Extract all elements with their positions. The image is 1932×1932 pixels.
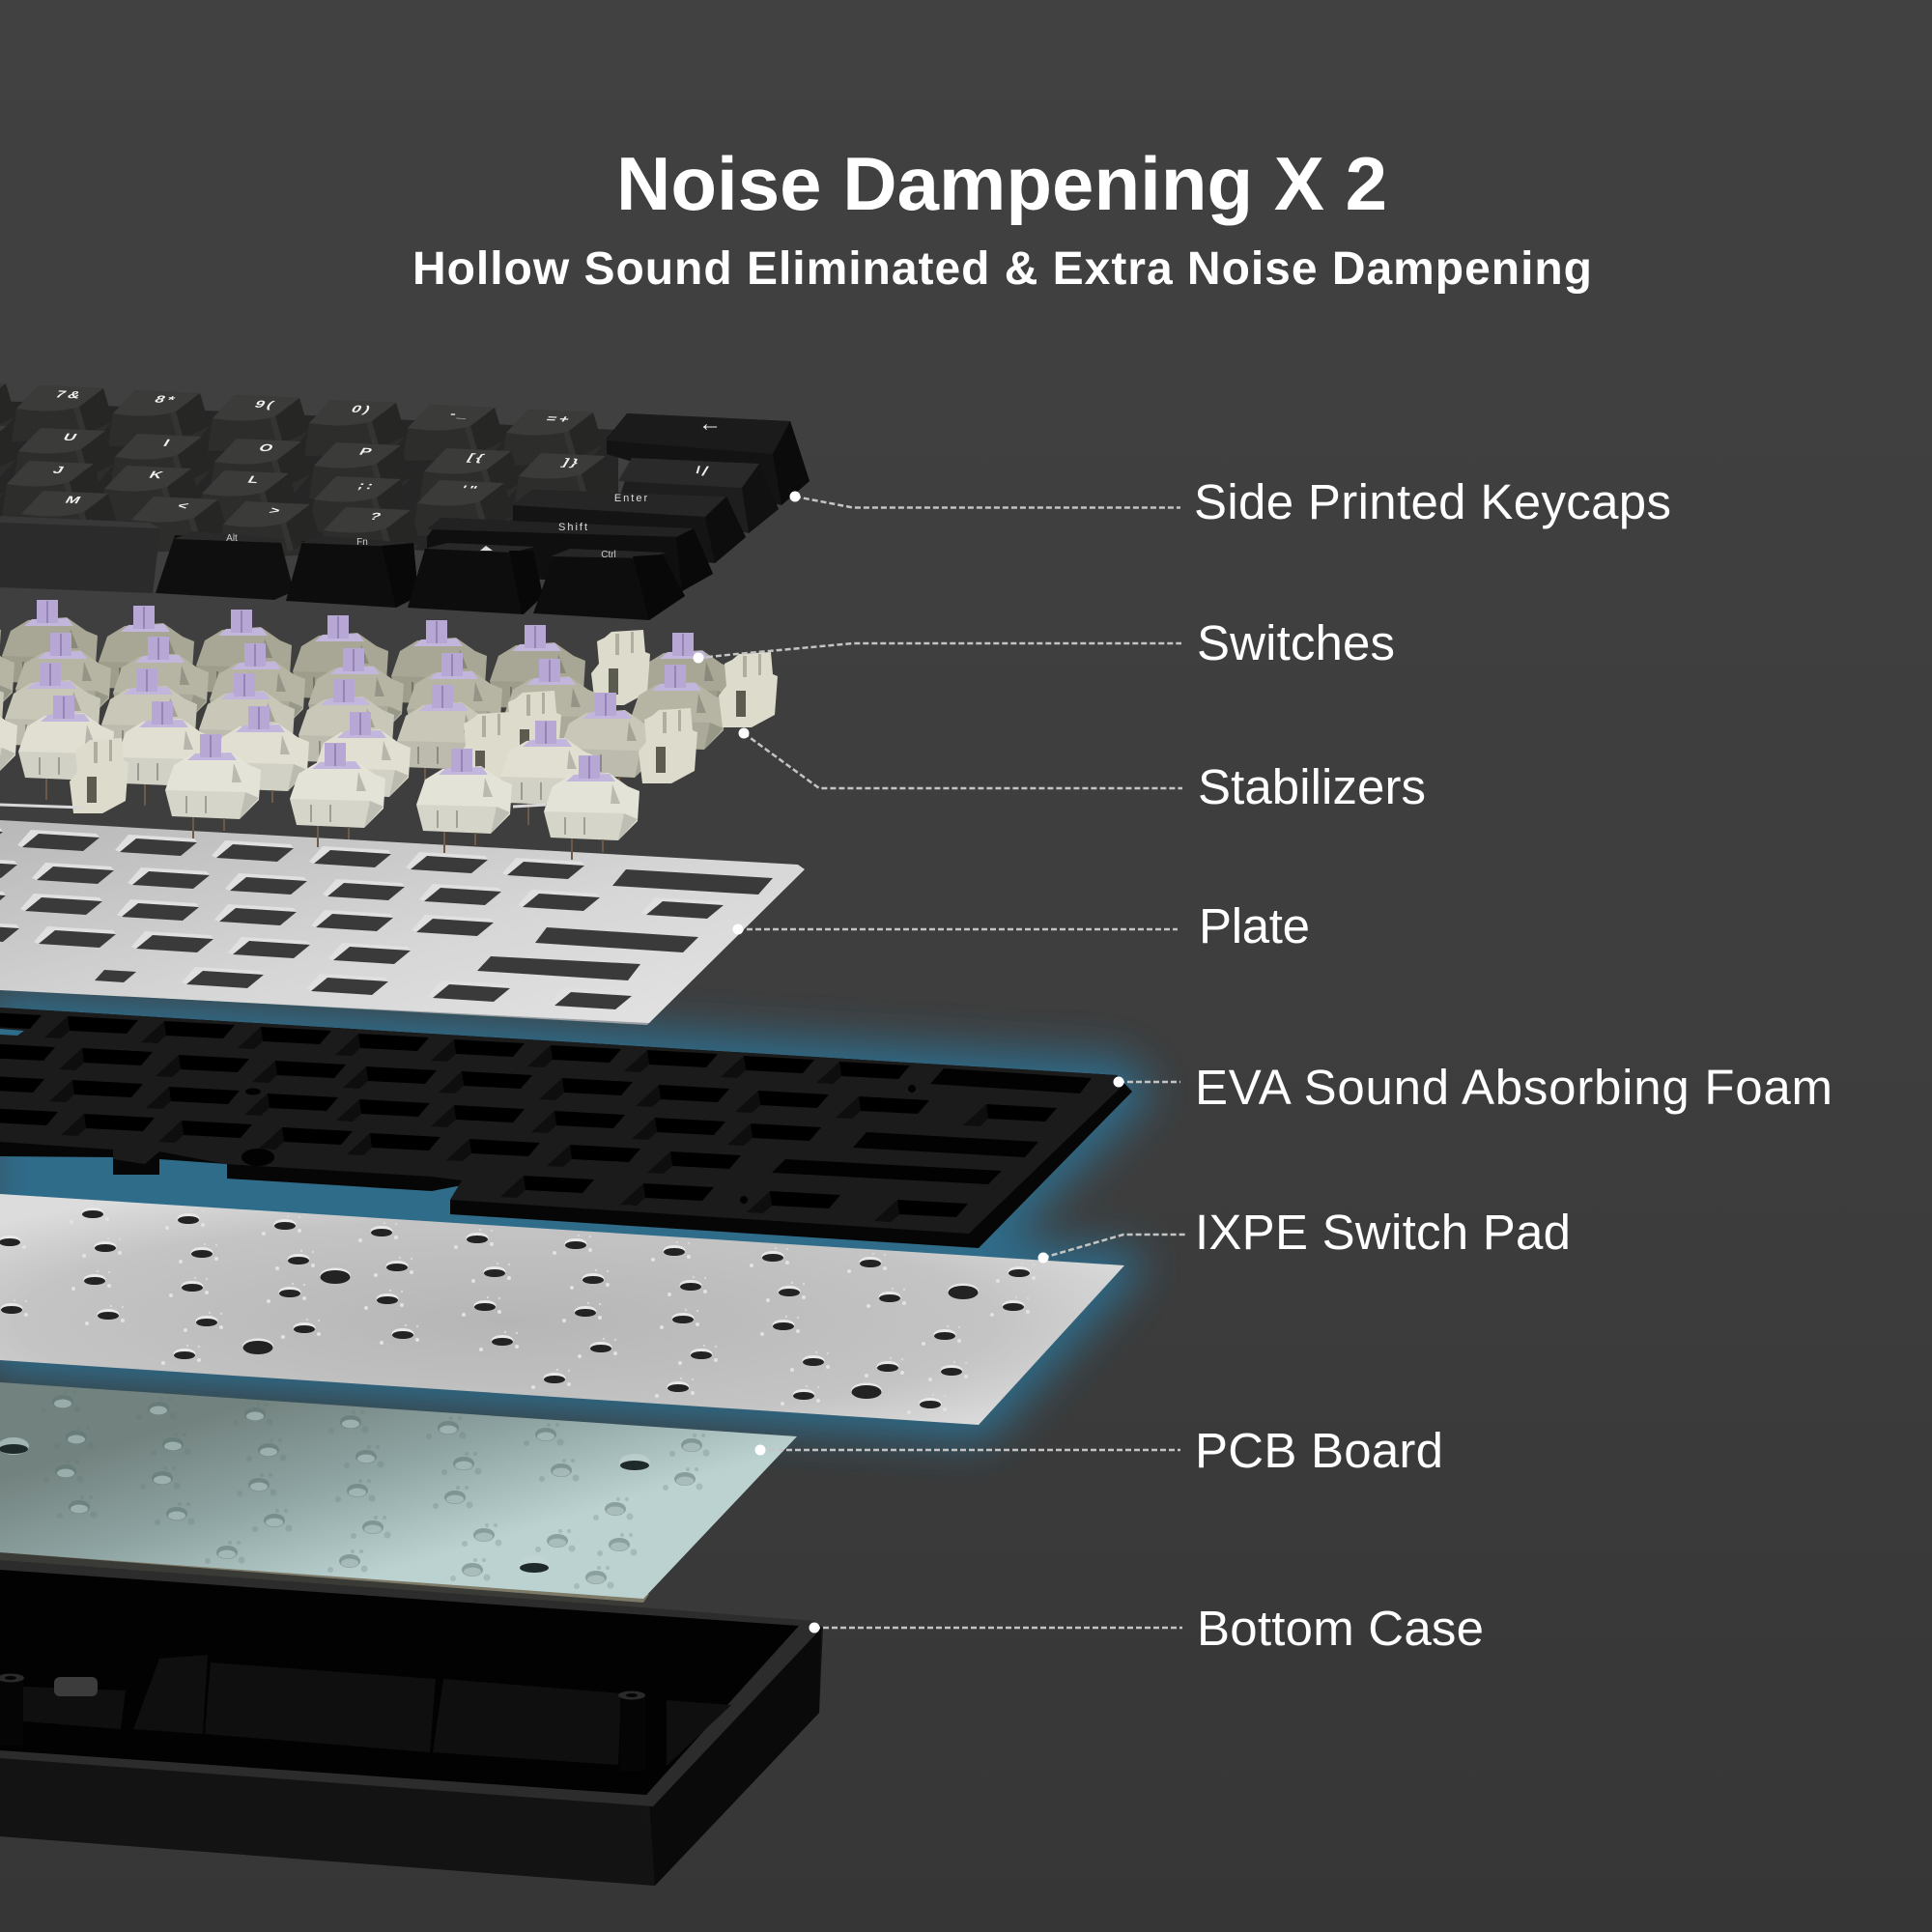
ctrl key (533, 549, 685, 620)
key row number: 8* (152, 394, 180, 406)
middle stabilizers (458, 691, 697, 787)
alt key: Alt (226, 533, 238, 544)
key row home: '" (458, 484, 482, 496)
fn key (286, 536, 418, 608)
switch row 3 (0, 657, 656, 797)
callout: IXPE switch pad: IXPE Switch Pad (1195, 1205, 1571, 1260)
screw post left (0, 1673, 24, 1746)
key row number: 9( (252, 399, 279, 411)
bottom case (0, 1557, 823, 1886)
switch row 5 (165, 734, 639, 860)
key row number: 7& (52, 389, 86, 402)
backspace key (607, 411, 810, 505)
key row bottom letters: M (63, 495, 86, 506)
backslash key (618, 458, 779, 533)
key row number: 0) (349, 404, 376, 415)
callout: IXPE switch pad (1037, 1205, 1571, 1264)
callout: stabilizers (738, 728, 1426, 814)
switches and stabilizers (0, 594, 778, 860)
title: Noise Dampening X 2 (616, 141, 1387, 226)
key row home: K (147, 469, 168, 481)
keycaps (0, 381, 810, 620)
space bar (0, 516, 160, 593)
rear stabilizer (591, 630, 650, 705)
callout: switches: Switches (1197, 615, 1395, 670)
front stabilizer (0, 738, 546, 813)
callout: side printed keycaps: Side Printed Keycaps (1194, 474, 1671, 529)
key row QWERTY: [{ (465, 452, 489, 464)
key row home (0, 456, 514, 536)
IXPE switch pad (0, 1194, 1124, 1425)
callout: bottom case (810, 1601, 1484, 1656)
menu key (408, 543, 543, 614)
PCB board (0, 1382, 797, 1607)
case rim (0, 1557, 819, 1806)
plate cutouts (0, 824, 773, 1009)
backslash key: \| (693, 465, 714, 476)
key row bottom letters (16, 491, 420, 563)
key row QWERTY (0, 423, 615, 509)
screw post right (618, 1690, 645, 1771)
shift key: Shift (558, 522, 589, 533)
foam top face (0, 1008, 1124, 1234)
EVA sound absorbing foam (0, 1008, 1132, 1248)
key row QWERTY: O (256, 442, 278, 454)
key row home: ;: (355, 480, 379, 492)
switch row 2 (0, 627, 725, 769)
ctrl key: Ctrl (601, 550, 616, 560)
callout: plate: Plate (1199, 898, 1310, 953)
callout: plate (732, 898, 1310, 953)
key row home: J (50, 465, 69, 476)
pad holes (0, 1204, 1036, 1414)
case interior panels (0, 1655, 731, 1766)
right stabilizer (719, 652, 778, 727)
foam holes (0, 1011, 1092, 1222)
case front outer wall (0, 1756, 655, 1886)
switch row 4 (0, 690, 596, 825)
key row bottom letters: > (267, 505, 285, 517)
callout: switches (694, 615, 1395, 670)
callout: PCB board: PCB Board (1195, 1423, 1443, 1478)
key row QWERTY: U (61, 432, 82, 443)
switch row 1 (0, 594, 733, 737)
keyboard underlay (0, 401, 618, 551)
callout: EVA sound absorbing foam: EVA Sound Absorbing Foam (1195, 1060, 1833, 1115)
key row QWERTY: I (160, 438, 175, 449)
plate (0, 820, 805, 1025)
key row bottom letters: < (175, 500, 193, 512)
key row QWERTY: ]} (559, 457, 583, 469)
shift key (427, 518, 713, 591)
subtitle: Hollow Sound Eliminated & Extra Noise Dampening (412, 243, 1592, 295)
callout: side printed keycaps (790, 474, 1671, 529)
callout: stabilizers: Stabilizers (1198, 759, 1426, 814)
enter key: Enter (614, 493, 649, 504)
case interior (0, 1570, 799, 1795)
PCB holes (0, 1390, 709, 1589)
callout: bottom case: Bottom Case (1197, 1601, 1484, 1656)
USB port (54, 1677, 98, 1696)
key row QWERTY: P (356, 446, 377, 458)
blue glow behind foam and pad (0, 1008, 1132, 1425)
callout: PCB board (755, 1423, 1443, 1478)
backspace key: ← (698, 411, 722, 437)
case right outer wall (649, 1629, 821, 1886)
key row number (0, 381, 603, 466)
fn key: Fn (356, 537, 368, 548)
enter key (513, 490, 746, 563)
key row number: =+ (543, 413, 575, 425)
foam window (0, 1029, 24, 1036)
key row number: -_ (447, 409, 474, 420)
alt key (156, 531, 294, 600)
key row home: L (245, 474, 265, 486)
key row bottom letters: ? (367, 511, 386, 523)
